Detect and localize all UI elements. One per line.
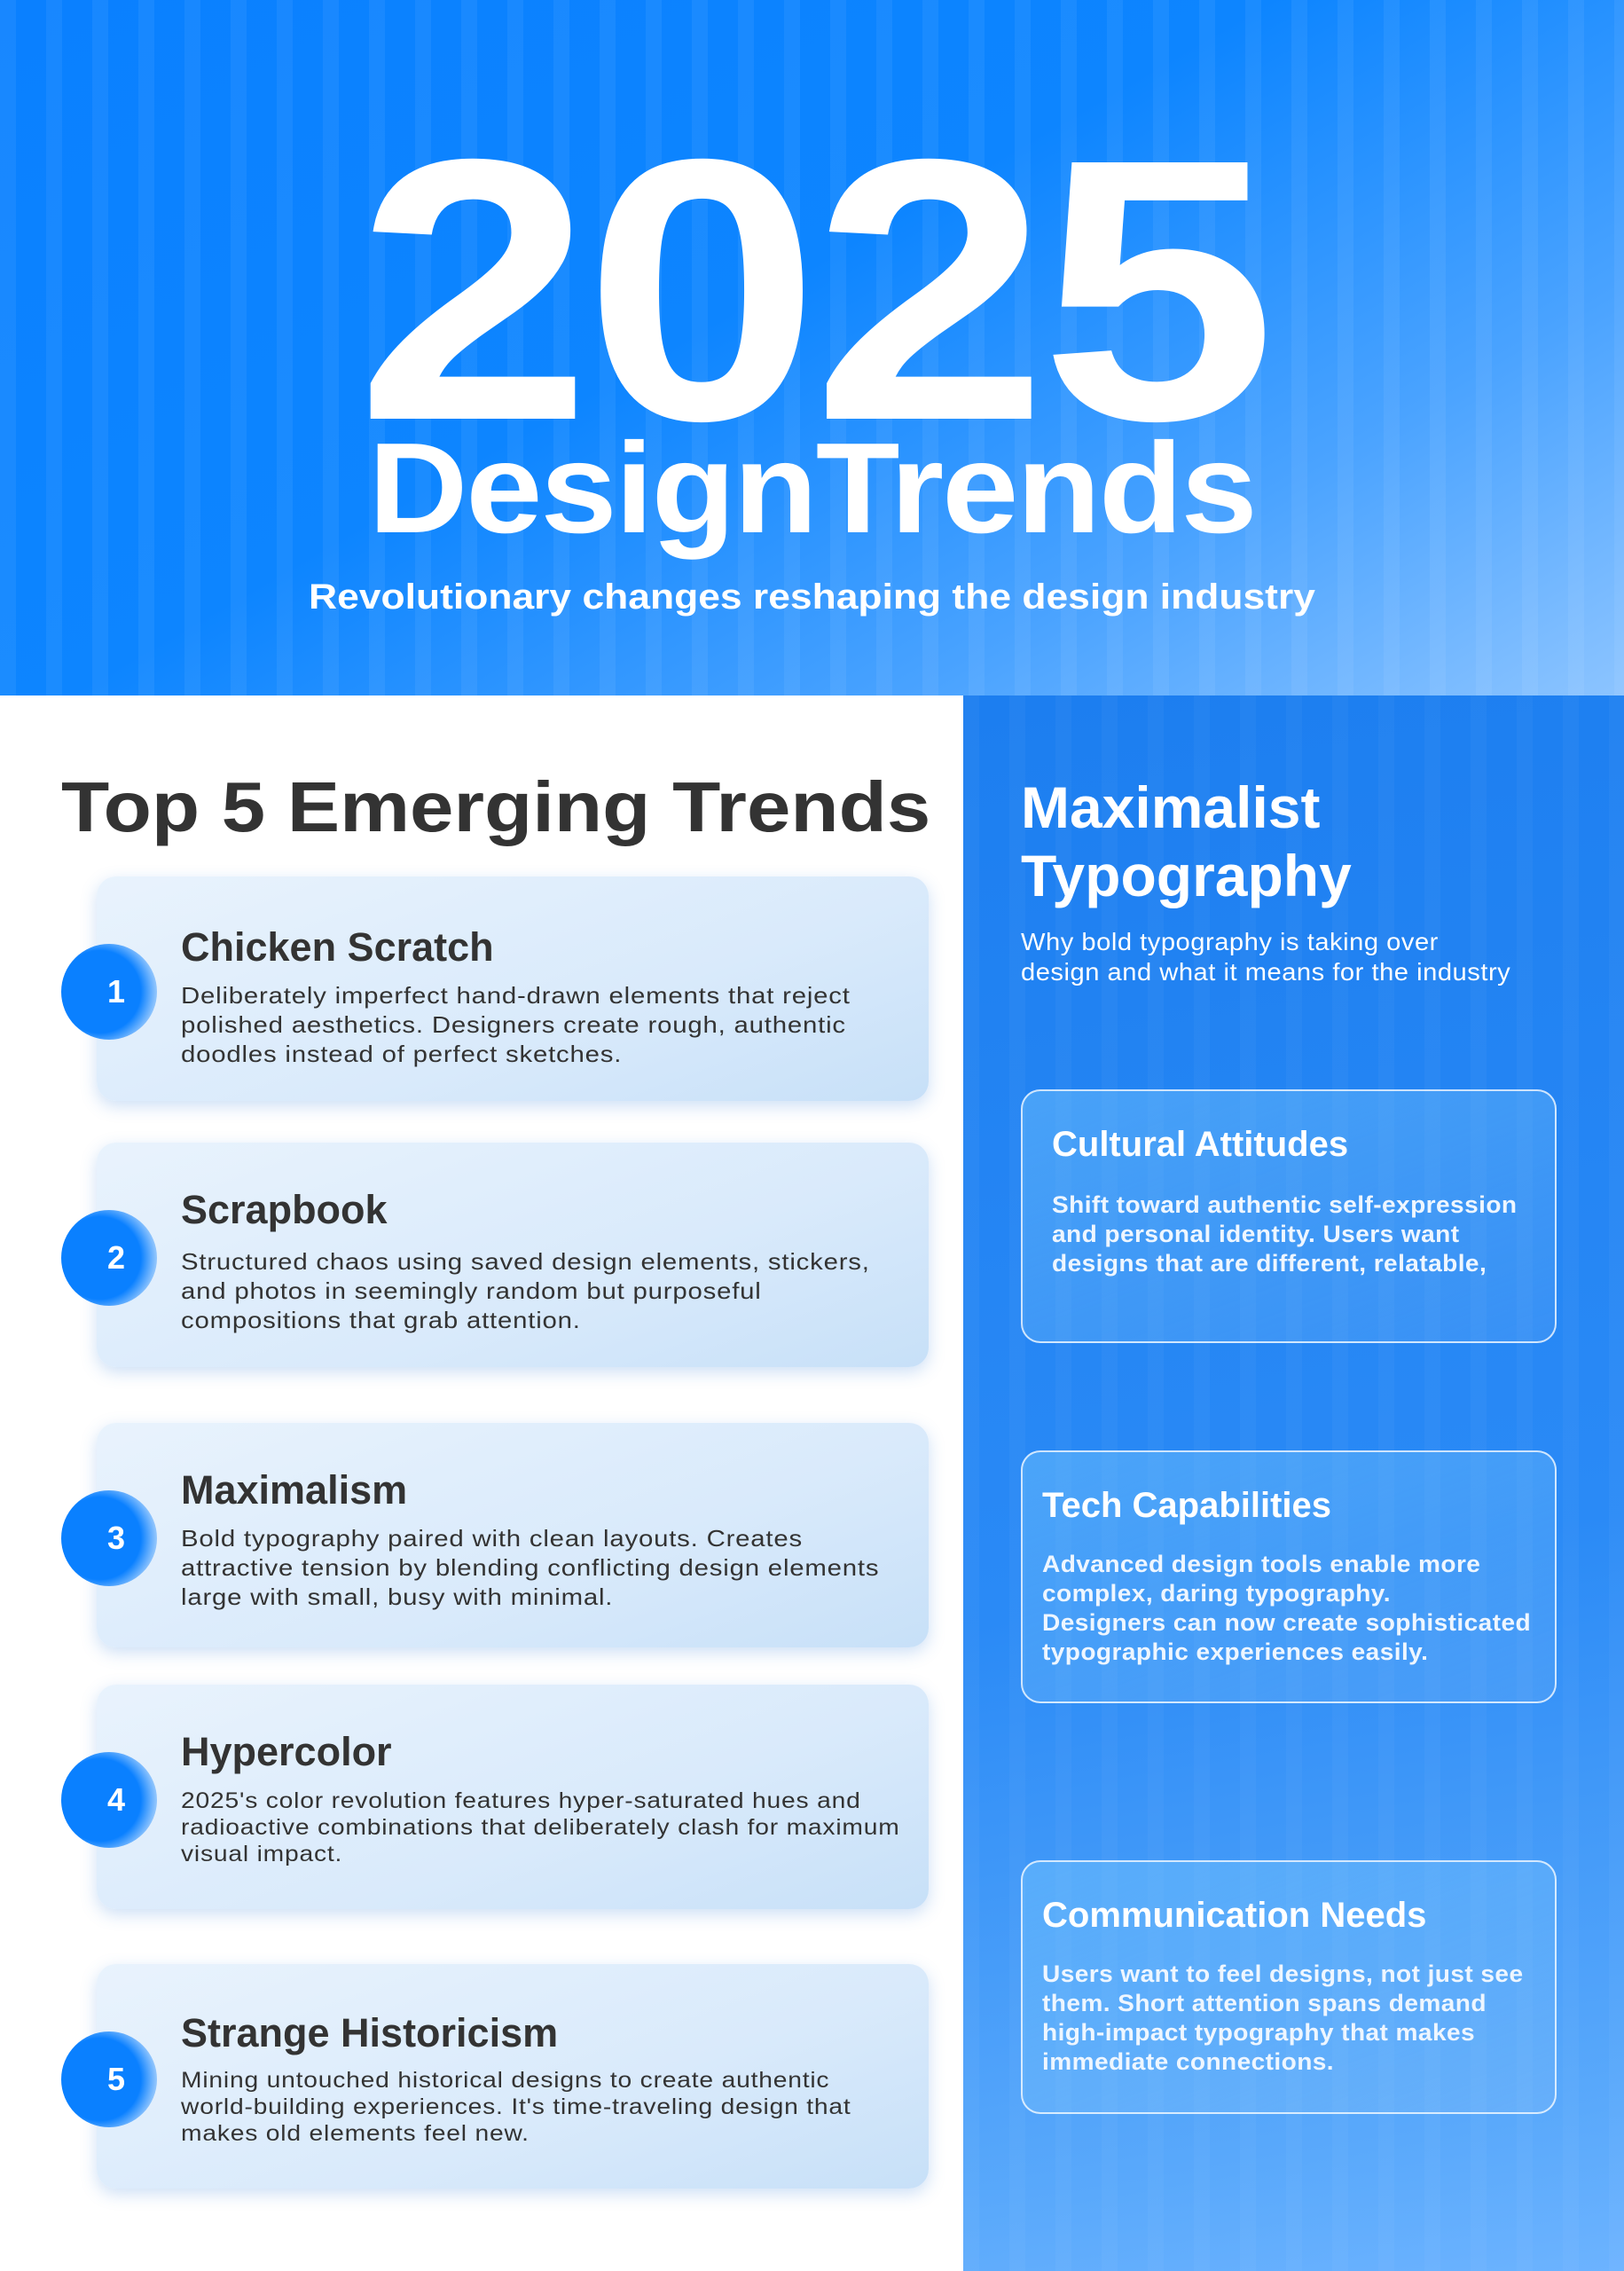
box: Tech Capabilities: complex, daring typography. — [1042, 1580, 1391, 1607]
card 3 — [61, 1421, 937, 1661]
right subtitle — [1021, 928, 1510, 986]
heading: Maximalist Typography — [1021, 774, 1352, 908]
box: Tech Capabilities: Advanced design tools enable more — [1042, 1551, 1480, 1577]
header — [0, 0, 1624, 695]
card 1: Chicken Scratch — [181, 924, 494, 970]
box: Communication Needs: them. Short attention spans demand — [1042, 1990, 1487, 2016]
box: Communication Needs: Users want to feel designs, not just see — [1042, 1961, 1524, 1987]
right panel — [963, 695, 1624, 2271]
card 3: Bold typography paired with clean layouts. Creates — [181, 1525, 803, 1552]
badge 2: 2 — [107, 1239, 125, 1276]
box: Tech Capabilities: typographic experiences easily. — [1042, 1638, 1428, 1665]
box: Cultural Attitudes: and personal identity. Users want — [1052, 1221, 1459, 1247]
right subtitle: Why bold typography is taking over — [1021, 928, 1439, 955]
card 1 — [61, 875, 937, 1114]
heading: Top 5 Emerging Trends: Top 5 Emerging Trends — [61, 767, 930, 846]
card 3: attractive tension by blending conflicting design elements — [181, 1554, 879, 1581]
card 3: Maximalism — [181, 1467, 407, 1513]
heading: Maximalist Typography: Maximalist — [1021, 774, 1320, 840]
box: Cultural Attitudes: Shift toward authentic self-expression — [1052, 1191, 1517, 1218]
card 5: makes old elements feel new. — [181, 2121, 530, 2146]
box: Communication Needs: immediate connections. — [1042, 2048, 1334, 2075]
card 4: Hypercolor — [181, 1729, 392, 1774]
card 2 — [61, 1141, 937, 1380]
badge 5 — [61, 2031, 157, 2127]
badge 1: 1 — [107, 973, 125, 1010]
card 1: polished aesthetics. Designers create rough, authentic — [181, 1011, 846, 1038]
badge 3 — [61, 1490, 157, 1586]
card 5: Mining untouched historical designs to create authentic — [181, 2068, 829, 2093]
box: Cultural Attitudes: designs that are different, relatable, — [1052, 1250, 1487, 1277]
box: Cultural Attitudes — [1021, 1089, 1557, 1343]
card 4: 2025's color revolution features hyper-saturated hues and — [181, 1788, 861, 1813]
box: Cultural Attitudes: Cultural Attitudes — [1052, 1125, 1348, 1164]
card 2: compositions that grab attention. — [181, 1307, 581, 1333]
badge 2 — [61, 1210, 157, 1306]
badge 3: 3 — [107, 1520, 125, 1556]
card 2: and photos in seemingly random but purposeful — [181, 1277, 762, 1304]
card 4: visual impact. — [181, 1842, 342, 1866]
card 2: Structured chaos using saved design elements, stickers, — [181, 1248, 870, 1275]
heading: Maximalist Typography: Typography — [1021, 843, 1352, 908]
card 2: Scrapbook — [181, 1187, 388, 1232]
title: DesignTrends: DesignTrends — [368, 416, 1256, 560]
box: Tech Capabilities: Tech Capabilities — [1042, 1486, 1331, 1525]
card 3: large with small, busy with minimal. — [181, 1583, 613, 1610]
card 1: doodles instead of perfect sketches. — [181, 1041, 622, 1067]
badge 4: 4 — [107, 1781, 125, 1818]
card 1: Deliberately imperfect hand-drawn elements that reject — [181, 982, 851, 1009]
right subtitle: design and what it means for the industry — [1021, 958, 1510, 986]
badge 5: 5 — [107, 2061, 125, 2097]
box: Communication Needs — [1021, 1860, 1557, 2114]
box: Tech Capabilities: Designers can now create sophisticated — [1042, 1609, 1531, 1636]
subtitle: Revolutionary changes reshaping the design industry — [309, 578, 1315, 617]
title: 2025: 2025 — [356, 83, 1268, 499]
box: Communication Needs: high-impact typography that makes — [1042, 2019, 1475, 2046]
box: Tech Capabilities — [1021, 1450, 1557, 1703]
card 5 — [61, 1962, 937, 2202]
card 4: radioactive combinations that deliberately clash for maximum — [181, 1815, 900, 1840]
card 5: Strange Historicism — [181, 2010, 558, 2055]
badge 1 — [61, 944, 157, 1040]
card 4 — [61, 1682, 937, 1921]
box: Communication Needs: Communication Needs — [1042, 1896, 1426, 1935]
card 5: world-building experiences. It's time-traveling design that — [181, 2094, 851, 2119]
badge 4 — [61, 1752, 157, 1848]
